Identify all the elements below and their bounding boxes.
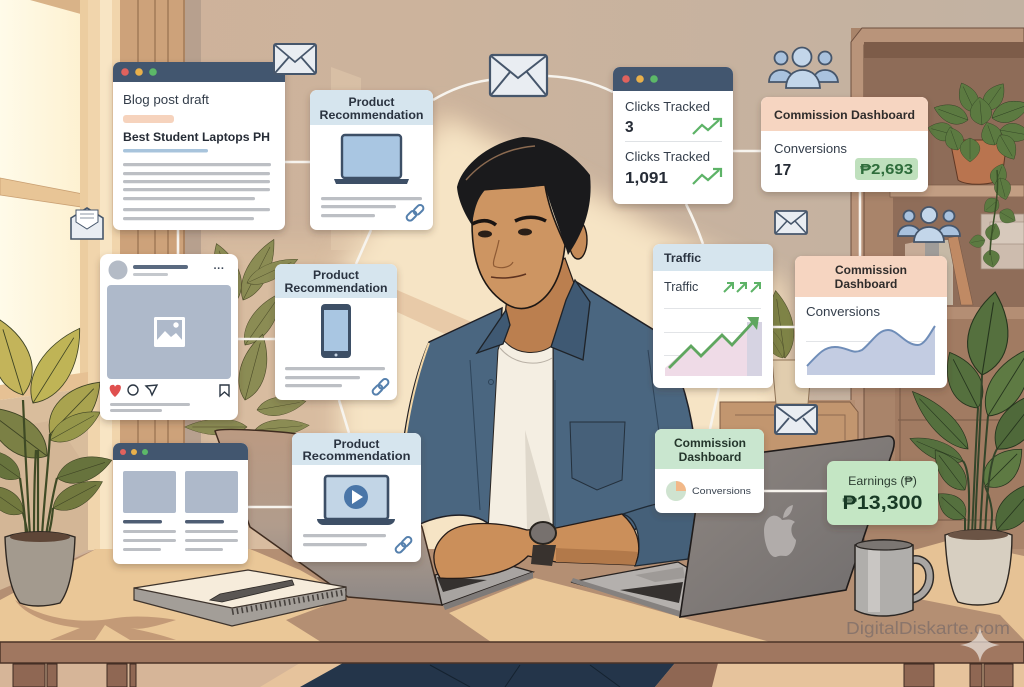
coffee mug (855, 540, 930, 616)
icon: heart (110, 385, 121, 397)
icon: people group top (769, 48, 838, 88)
panel: clicks tracked: Clicks Tracked (625, 150, 710, 164)
panel: commission dashboard pie: Conversions (692, 486, 751, 497)
side cabinet and back plant (720, 289, 858, 470)
icon: image placeholder (154, 317, 185, 347)
icon: open envelope (71, 208, 103, 239)
icon: envelope by cabinet (775, 405, 817, 434)
earnings badge: ₱2,693 (860, 162, 913, 178)
curtain (88, 0, 201, 550)
panel: traffic chart (653, 244, 773, 388)
window (0, 0, 88, 590)
panel: commission dashboard pie (655, 429, 764, 513)
floor, trousers and desk (0, 540, 1024, 687)
shirt (400, 281, 698, 540)
watch (530, 522, 556, 566)
left laptop (215, 429, 533, 610)
forearm, hand and watch (434, 501, 698, 578)
icon: people group shelf (898, 207, 960, 242)
panel: product recommendation video: Recommendation (302, 449, 410, 463)
icon: video laptop (317, 476, 395, 525)
collar (477, 280, 590, 360)
panel: commission dashboard top: Conversions (774, 142, 847, 156)
earnings badge (855, 158, 918, 180)
panel: commission dashboard conversions chart: Dashboard (835, 277, 897, 291)
icon: link (371, 378, 390, 396)
panel: commission dashboard top: Commission Dashboard (774, 108, 915, 122)
right potted plant (905, 289, 1024, 605)
pie chart (666, 481, 686, 501)
conversions area chart (807, 326, 935, 375)
panel: commission dashboard conversions chart: Commission (835, 263, 907, 277)
blog label: Blog post draft (123, 93, 210, 107)
panel: social media post (100, 254, 238, 420)
panel: blog post draft (113, 62, 285, 230)
panel: product recommendation video: Product (334, 437, 380, 451)
panel: social media post: ··· (214, 263, 224, 275)
panel: clicks tracked: 3 (625, 119, 634, 136)
panel: earnings (827, 461, 938, 525)
ear (569, 221, 587, 259)
panel: clicks tracked: Clicks Tracked (625, 100, 710, 114)
icon: laptop logo (764, 505, 796, 557)
panel: product recommendation phone (275, 264, 397, 400)
icon: small envelope (775, 211, 807, 234)
right laptop (571, 436, 894, 617)
panel: product recommendation phone: Product (313, 268, 359, 282)
person (400, 137, 698, 540)
panel: clicks tracked: 1,091 (625, 170, 668, 187)
connector lines (178, 76, 860, 507)
rolled sleeve (623, 501, 698, 566)
icon: large envelope (490, 55, 547, 96)
watermark (846, 618, 1010, 662)
plant behind left laptop (185, 235, 310, 438)
left potted plant (0, 315, 115, 606)
panel: traffic chart: Traffic (664, 251, 701, 265)
icon: link (394, 536, 413, 554)
icon: trend arrow (693, 169, 721, 184)
icon: laptop (334, 135, 409, 184)
panel: commission dashboard conversions chart: Conversions (806, 305, 880, 319)
watermark: DigitalDiskarte.com (846, 618, 1010, 638)
bookshelf (775, 28, 1024, 560)
notebook and pen (134, 570, 346, 626)
panel: traffic chart: Traffic (664, 280, 698, 294)
panel: commission dashboard top (761, 97, 928, 192)
panel: product recommendation phone: Recommendation (284, 281, 388, 295)
neck (502, 258, 574, 354)
pot (945, 530, 1012, 605)
plant shadow on desk (15, 600, 176, 640)
panel: product recommendation laptop: Recommendation (320, 108, 424, 122)
icon: phone (321, 304, 351, 358)
face (472, 185, 565, 309)
pot (5, 532, 75, 606)
icon: three arrows (724, 283, 760, 292)
t-shirt (488, 338, 553, 532)
panel: earnings: Earnings (₱) (848, 474, 917, 488)
panel: commission dashboard pie: Commission (674, 436, 746, 450)
icon: comment, share, bookmark (128, 385, 229, 396)
icon: trend arrow (693, 119, 721, 134)
icon: link (405, 204, 425, 222)
panel: website layout (113, 443, 248, 564)
shelf plant (926, 79, 1024, 269)
panel: commission dashboard conversions chart (795, 256, 947, 388)
panel: product recommendation laptop (310, 90, 433, 230)
panel: commission dashboard pie: Dashboard (679, 450, 741, 464)
pocket and folds (570, 422, 625, 490)
panel: clicks tracked (613, 67, 733, 204)
panel: product recommendation laptop: Product (348, 95, 395, 109)
panel: commission dashboard top: 17 (774, 162, 791, 179)
panel: earnings: ₱13,300 (842, 493, 922, 514)
hair (457, 137, 591, 255)
forearm and hand (434, 514, 639, 578)
facial features (472, 217, 546, 225)
traffic chart (665, 317, 762, 376)
icon: envelope by blog card (274, 44, 316, 74)
blog headline: Best Student Laptops PH (123, 130, 270, 144)
panel: product recommendation video (292, 433, 421, 562)
